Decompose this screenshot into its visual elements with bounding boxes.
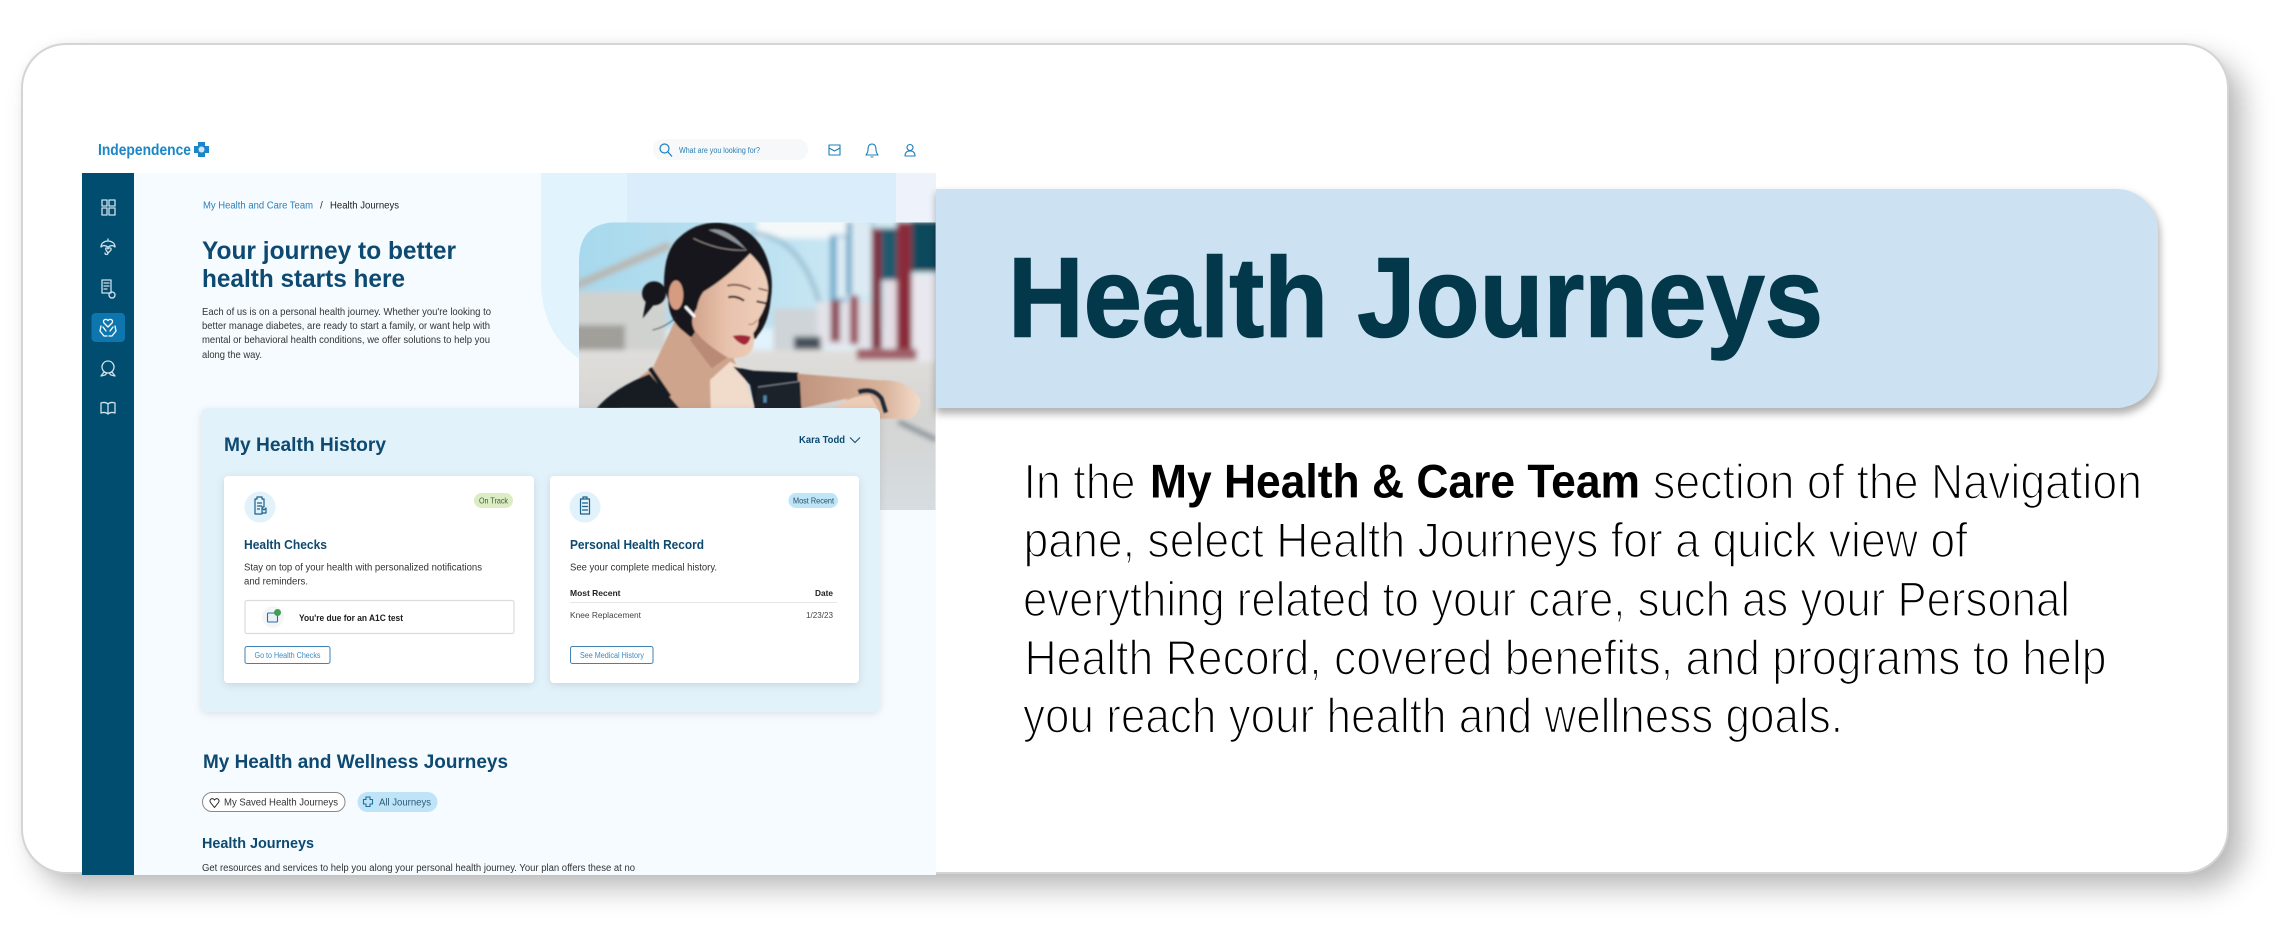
icon: bell: [866, 144, 878, 157]
body text: section of the Navigation: [1653, 455, 2142, 509]
card description: [244, 562, 482, 588]
page heading: health starts here: [202, 265, 405, 293]
heading: my health history: My Health History: [224, 435, 386, 456]
body text: everything related to your care, such as your Personal: [1023, 573, 2070, 627]
breadcrumb: [203, 200, 399, 212]
card: health checks: [224, 476, 534, 685]
button: see medical history: [570, 646, 653, 664]
lips: [733, 335, 751, 345]
breadcrumb: Health Journeys: [330, 200, 399, 212]
breadcrumb: My Health and Care Team: [203, 200, 313, 212]
button: go to health checks: Go to Health Checks: [254, 651, 320, 660]
hero background shapes: [541, 173, 936, 365]
icon: clipboard checks: [244, 492, 276, 522]
neck and chest: [620, 320, 736, 408]
logo: Independence: Independence: [98, 142, 191, 159]
icon: dashboard: [102, 200, 115, 215]
hero photo: woman checking watch: [570, 215, 943, 517]
title banner: [936, 189, 2158, 408]
search box: What are you looking for?: [679, 146, 760, 155]
intro paragraph: better manage diabetes, are ready to start a family, or want help with: [202, 320, 490, 332]
title banner shadow: [936, 193, 2160, 414]
body text: pane, select Health Journeys for a quick view of: [1024, 514, 1968, 568]
table: most recent records: Knee Replacement: [570, 610, 642, 620]
card: personal health record: [550, 476, 859, 685]
status badge: most recent: [788, 493, 838, 508]
app header: [98, 139, 915, 160]
body text: [1023, 454, 2142, 743]
hair strand: [754, 290, 770, 340]
table: most recent records: [570, 588, 837, 620]
icon: open book: [101, 402, 115, 414]
intro paragraph: along the way.: [202, 349, 262, 361]
title: Health Journeys: Health Journeys: [1008, 234, 1823, 360]
filter pill: my saved health journeys: [202, 792, 345, 812]
icon: award ribbon: [101, 361, 115, 376]
icon: user: [905, 144, 915, 156]
icon: umbrella heart: [101, 239, 115, 254]
screenshot: health journeys app page: [82, 139, 943, 875]
status badge: most recent: Most Recent: [793, 496, 835, 506]
icon: mail: [829, 145, 840, 155]
search box: [653, 139, 808, 160]
card description: Stay on top of your health with personalized notifications: [244, 562, 482, 574]
top: [597, 374, 679, 408]
member selector: Kara Todd: Kara Todd: [799, 434, 845, 446]
filter pill: all journeys: All Journeys: [379, 798, 431, 808]
table: most recent records: 1/23/23: [806, 610, 833, 620]
description: health journeys: Get resources and services to help you along your personal health journey. Your plan offers these at no: [202, 863, 635, 874]
earbud: [686, 307, 694, 316]
notice: A1C test due: You're due for an A1C test: [299, 613, 404, 624]
icon: hands heart: [100, 319, 116, 336]
body text: In the: [1024, 455, 1136, 509]
intro paragraph: mental or behavioral health conditions, we offer solutions to help you: [202, 334, 490, 346]
icon: clipboard list: [570, 492, 600, 522]
phone: [754, 381, 801, 409]
card description: See your complete medical history.: [570, 562, 717, 574]
page heading: [202, 237, 456, 293]
breadcrumb: /: [320, 200, 323, 212]
active nav highlight: [92, 313, 125, 342]
intro paragraph: [202, 306, 491, 361]
icon: document clock: [102, 280, 115, 298]
button: go to health checks: [245, 646, 330, 664]
sidebar navigation: [82, 173, 134, 875]
eyes: [728, 297, 744, 301]
panel: my health history: [201, 408, 880, 714]
status badge: on track: On Track: [479, 496, 509, 506]
button: see medical history: See Medical History: [580, 651, 644, 660]
page heading: Your journey to better: [202, 237, 456, 265]
card title: Health Checks: [244, 538, 327, 552]
card title: Personal Health Record: [570, 538, 704, 552]
filter pill: my saved health journeys: My Saved Health Journeys: [224, 798, 338, 808]
notice: A1C test due: [245, 600, 514, 634]
subheading: health journeys: Health Journeys: [202, 836, 314, 852]
ear: [669, 280, 683, 310]
body text: Health Record, covered benefits, and programs to help: [1024, 631, 2106, 685]
table: most recent records: Date: [815, 588, 833, 598]
main page background: [134, 173, 936, 875]
intro paragraph: Each of us is on a personal health journey. Whether you're looking to: [202, 306, 491, 318]
body text: you reach your health and wellness goals.: [1023, 689, 1843, 743]
arm: [797, 374, 920, 419]
hair: [664, 223, 772, 340]
face: [692, 253, 768, 358]
heading: my health and wellness journeys: My Health and Wellness Journeys: [203, 752, 508, 773]
card description: and reminders.: [244, 576, 308, 588]
bun: [642, 281, 666, 305]
status badge: on track: [474, 493, 513, 508]
body text: My Health & Care Team: [1150, 454, 1640, 508]
table: most recent records: Most Recent: [570, 588, 621, 598]
filter pill: all journeys: [358, 792, 438, 812]
